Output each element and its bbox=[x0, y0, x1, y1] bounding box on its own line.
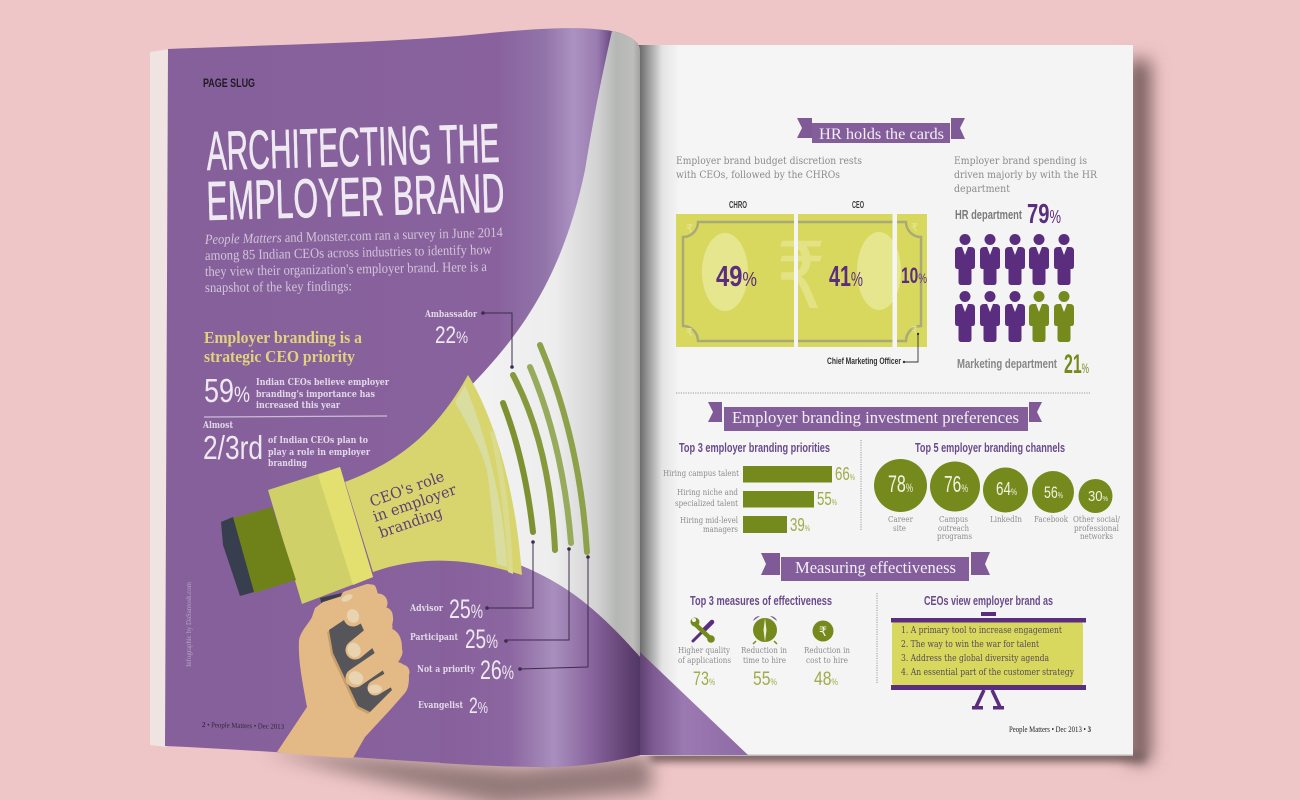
intro text bbox=[204, 226, 503, 296]
labels: CHRO and CEO: CEO bbox=[852, 200, 864, 211]
measure: time to hire: time to hire bbox=[743, 656, 786, 665]
rupee watermark: ₹ bbox=[776, 223, 826, 330]
stat: 59%: 59% bbox=[204, 372, 250, 409]
board list: 2. The way to win the war for talent bbox=[901, 640, 1039, 650]
label: HR department 79%: HR department bbox=[955, 207, 1022, 222]
measure: quality: Higher quality bbox=[678, 646, 730, 655]
magazine shadows bbox=[260, 60, 1150, 800]
banner: HR holds the cards: HR holds the cards bbox=[819, 126, 944, 143]
label: HR department 79% bbox=[955, 198, 1061, 229]
people pictogram bbox=[955, 234, 1074, 342]
board list bbox=[901, 626, 1075, 678]
purple page bbox=[165, 28, 640, 767]
measure: cost to hire: cost to hire bbox=[806, 656, 848, 665]
stat: 59%: branding's importance has bbox=[256, 390, 375, 400]
label: HR department 79%: 79% bbox=[1027, 198, 1061, 229]
page edge strip bbox=[150, 49, 170, 747]
grip bbox=[327, 618, 392, 714]
banner: investment preferences: Employer branding investment preferences bbox=[732, 408, 1019, 427]
icon: rupee coin: ₹ bbox=[819, 625, 827, 640]
bubble chart: channels bbox=[874, 459, 1120, 541]
megaphone label: branding bbox=[376, 503, 445, 542]
bubble: facebook bbox=[1032, 471, 1074, 524]
bubble: campus outreach: outreach bbox=[938, 524, 969, 533]
bubble: campus outreach: 76% bbox=[944, 471, 968, 497]
megaphone bbox=[221, 375, 522, 606]
label: Marketing department 21%: 21% bbox=[1064, 349, 1089, 379]
measure: cost to hire: 48% bbox=[814, 669, 838, 690]
label: evangelist: Evangelist bbox=[418, 701, 464, 711]
bar chart: priorities: managers bbox=[703, 525, 738, 534]
measure: time to hire bbox=[741, 646, 787, 690]
stat: 59%: Indian CEOs believe employer bbox=[256, 378, 389, 388]
bar chart: priorities: Hiring niche and bbox=[677, 488, 738, 497]
horn bbox=[345, 375, 522, 575]
presentation board bbox=[891, 612, 1086, 710]
white curl bbox=[460, 31, 640, 657]
bubble: other networks: professional bbox=[1074, 524, 1119, 533]
bubble: career site: Career bbox=[888, 515, 913, 524]
dark end cap bbox=[221, 517, 254, 596]
label: Marketing department 21%: Marketing department bbox=[957, 356, 1057, 371]
heading: strategic CEO priority: strategic CEO priority bbox=[204, 347, 355, 366]
measure: quality: of applications bbox=[678, 656, 731, 665]
bar chart: priorities: Hiring mid-level bbox=[680, 516, 738, 525]
banner: investment preferences bbox=[708, 402, 1042, 431]
note border bbox=[683, 222, 921, 341]
share: CEO 41%: 41% bbox=[829, 261, 863, 293]
bubble: other networks: 30% bbox=[1088, 488, 1108, 505]
stat: 2/3rd: of Indian CEOs plan to bbox=[268, 436, 368, 446]
bubble: campus outreach bbox=[930, 462, 980, 541]
heading: strategic CEO priority bbox=[204, 328, 362, 366]
rupee note chart: ₹ bbox=[686, 222, 693, 235]
share: CHRO 49%: 49% bbox=[716, 261, 757, 293]
right footer: People Matters • Dec 2013 • 3 bbox=[1009, 725, 1091, 734]
title bbox=[206, 112, 505, 232]
credit: Infographic by DaSantosh.com bbox=[185, 581, 193, 667]
bubble: other networks: Other social/ bbox=[1073, 515, 1120, 524]
board list: 3. Address the global diversity agenda bbox=[901, 654, 1050, 664]
measure: quality: 73% bbox=[693, 669, 715, 690]
stat: 59% bbox=[204, 372, 389, 411]
stat: 2/3rd: play a role in employer bbox=[268, 448, 370, 458]
label: Marketing department 21% bbox=[957, 349, 1089, 379]
sound arcs bbox=[503, 345, 587, 552]
banner: HR holds the cards bbox=[797, 118, 965, 143]
label: advisor: Advisor bbox=[409, 604, 443, 614]
fingers bbox=[347, 590, 402, 688]
board list: 4. An essential part of the customer strategy bbox=[901, 668, 1075, 678]
labels: CHRO and CEO: CHRO bbox=[729, 200, 747, 211]
label: not a priority bbox=[417, 655, 514, 685]
share: CMO 10%: 10% bbox=[901, 263, 927, 288]
purple corner triangle bbox=[640, 652, 748, 755]
labels: CHRO and CEO bbox=[729, 200, 864, 211]
rupee note chart: ₹ bbox=[686, 326, 693, 339]
stat: 2/3rd: Almost bbox=[202, 421, 234, 431]
icon: wrench and screwdriver bbox=[690, 618, 715, 643]
bar chart: priorities: 39% bbox=[790, 515, 810, 535]
bubble: campus outreach: Campus bbox=[939, 515, 968, 524]
text: spending: department bbox=[954, 183, 1011, 195]
bubble: facebook: 56% bbox=[1044, 483, 1063, 502]
banner: measuring effectiveness: Measuring effectiveness bbox=[795, 558, 956, 577]
stat: 59%: increased this year bbox=[256, 401, 340, 411]
heading: measures: Top 3 measures of effectiveness bbox=[690, 593, 832, 608]
measure: cost to hire bbox=[804, 646, 850, 690]
left page bbox=[150, 28, 640, 767]
text: budget discretion: with CEOs, followed by the CHROs bbox=[676, 169, 840, 181]
bar chart: priorities: Hiring campus talent bbox=[663, 469, 740, 478]
measure: cost to hire: Reduction in bbox=[804, 646, 850, 655]
lower purple wave bbox=[440, 557, 640, 767]
measure: time to hire: Reduction in bbox=[741, 646, 787, 655]
rupee note chart: ₹ bbox=[911, 221, 918, 234]
green barrel bbox=[233, 507, 296, 593]
bubble: other networks bbox=[1073, 479, 1120, 541]
heading: CEOs view: CEOs view employer brand as bbox=[924, 593, 1053, 608]
bar chart: priorities: specialized talent bbox=[675, 499, 739, 508]
collar bbox=[268, 467, 373, 604]
icon: rupee coin bbox=[812, 620, 834, 642]
stat: 2/3rd: branding bbox=[268, 459, 308, 469]
megaphone label: in employer bbox=[370, 480, 459, 526]
page slug: PAGE SLUG bbox=[203, 76, 255, 90]
heading: priorities: Top 3 employer branding priorities bbox=[679, 440, 830, 455]
label: advisor bbox=[409, 594, 483, 624]
bubble: career site bbox=[874, 459, 927, 533]
bar chart: priorities: 55% bbox=[817, 489, 837, 509]
label: ambassador bbox=[424, 310, 477, 349]
rupee note chart: ₹ bbox=[911, 324, 918, 337]
intro text: snapshot of the key findings: bbox=[205, 279, 352, 296]
stat: 2/3rd bbox=[202, 421, 370, 469]
text: spending bbox=[954, 155, 1098, 195]
bubble: other networks: networks bbox=[1080, 532, 1113, 541]
left footer: 2 • People Matters • Dec 2013 bbox=[202, 720, 284, 731]
bar chart: priorities bbox=[663, 464, 855, 535]
label: evangelist bbox=[418, 693, 488, 718]
label: participant: 25% bbox=[465, 624, 498, 654]
heading: channels: Top 5 employer branding channels bbox=[915, 440, 1065, 455]
right page bbox=[638, 45, 1133, 755]
bubble: career site: site bbox=[893, 524, 906, 533]
heading: strategic CEO priority: Employer branding is a bbox=[204, 328, 362, 347]
bubble: linkedin: 64% bbox=[996, 479, 1017, 499]
icon: alarm clock bbox=[753, 616, 777, 644]
bubble: linkedin: LinkedIn bbox=[990, 515, 1022, 524]
hand bbox=[277, 584, 409, 758]
label: participant: Participant bbox=[410, 633, 459, 643]
measure: quality bbox=[678, 646, 731, 690]
rupee note chart bbox=[676, 212, 927, 349]
title: EMPLOYER BRAND bbox=[206, 162, 505, 232]
label: not a priority: Not a priority bbox=[417, 665, 476, 675]
label: not a priority: 26% bbox=[480, 655, 514, 685]
title: ARCHITECTING THE bbox=[206, 112, 500, 182]
label: ambassador: Ambassador bbox=[424, 310, 477, 320]
stat: 2/3rd: 2/3rd bbox=[203, 429, 263, 466]
text: budget discretion: Employer brand budget discretion rests bbox=[676, 155, 862, 167]
label: advisor: 25% bbox=[449, 594, 483, 624]
connector lines bbox=[481, 311, 590, 671]
label: ambassador: 22% bbox=[435, 322, 468, 349]
board list: 1. A primary tool to increase engagement bbox=[901, 626, 1062, 636]
megaphone label bbox=[367, 467, 459, 542]
bar chart: priorities: 66% bbox=[835, 464, 855, 484]
intro text: they view their organization's employer brand. Here is a bbox=[205, 260, 488, 280]
label: evangelist: 2% bbox=[469, 693, 488, 718]
bubble: facebook: Facebook bbox=[1034, 515, 1068, 524]
megaphone label: CEO's role bbox=[367, 467, 447, 511]
handle bbox=[320, 590, 358, 606]
callout: Chief Marketing Officer: Chief Marketing Officer bbox=[827, 356, 901, 367]
text: spending: driven majorly by with the HR bbox=[954, 169, 1098, 181]
fingernails bbox=[340, 593, 382, 694]
banner: measuring effectiveness bbox=[761, 552, 990, 581]
bubble: career site: 78% bbox=[888, 471, 913, 498]
text: budget discretion bbox=[676, 155, 862, 181]
text: spending: Employer brand spending is bbox=[954, 155, 1087, 167]
label: participant bbox=[410, 624, 498, 654]
callout: Chief Marketing Officer bbox=[827, 333, 919, 367]
intro text: among 85 Indian CEOs across industries to identify how bbox=[205, 243, 493, 264]
bubble: campus outreach: programs bbox=[937, 532, 972, 541]
measure: time to hire: 55% bbox=[753, 669, 777, 690]
intro text: People Matters and Monster.com ran a survey in June 2014 bbox=[204, 226, 503, 248]
bubble: linkedin bbox=[983, 468, 1028, 524]
